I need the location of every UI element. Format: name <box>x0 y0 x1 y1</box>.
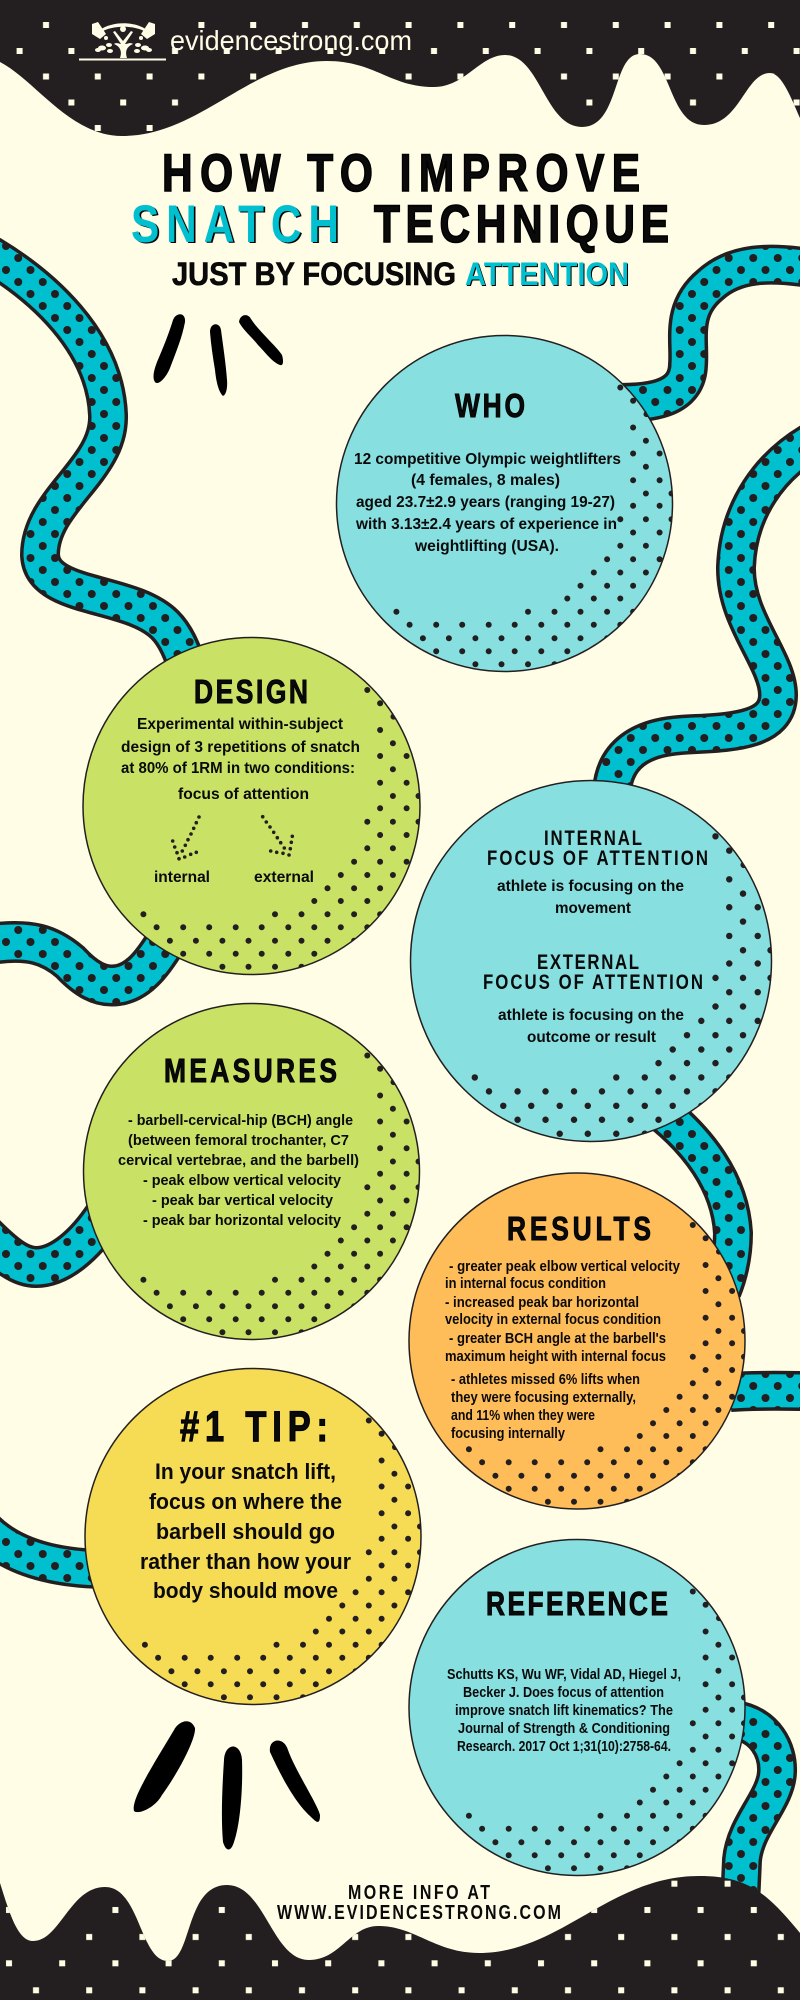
snake: ribbon between focus and results <box>665 1115 733 1290</box>
snake: long right ribbon <box>612 440 800 790</box>
text: results list: maximum height with internal focus <box>445 1349 666 1365</box>
heading: tip: #1 TIP: <box>180 1403 328 1451</box>
text: design description: design of 3 repetitions of snatch <box>121 739 360 756</box>
logo icon: barbell tree <box>79 22 166 60</box>
title: TECHNIQUE <box>374 196 669 254</box>
text: results list: focusing internally <box>451 1426 565 1442</box>
title <box>131 145 669 254</box>
text: tip advice: barbell should go <box>156 1519 335 1544</box>
text: tip advice <box>140 1459 351 1603</box>
heading: internal focus <box>487 827 708 871</box>
heading: internal focus: INTERNAL <box>544 827 642 851</box>
heading: external focus: EXTERNAL <box>537 951 639 975</box>
heading: internal focus: FOCUS OF ATTENTION <box>487 847 708 871</box>
text: who participants: 12 competitive Olympic weightlifters <box>354 451 621 468</box>
text: who participants: (4 females, 8 males) <box>411 472 560 489</box>
text: tip advice: focus on where the <box>149 1489 342 1514</box>
text: internal definition: movement <box>555 900 632 917</box>
footer text <box>277 1881 561 1923</box>
text: results list: - athletes missed 6% lifts when <box>451 1372 640 1388</box>
title: HOW TO IMPROVE <box>162 145 640 203</box>
heading: who: WHO <box>455 388 525 425</box>
text: measures list: cervical vertebrae, and the barbell) <box>118 1152 359 1169</box>
snake: left ribbon below design <box>0 935 170 986</box>
text: tip advice: In your snatch lift, <box>155 1459 336 1484</box>
panel: design <box>83 638 420 974</box>
arrow: dotted to external <box>263 817 292 855</box>
icon: top attention marks <box>154 314 283 396</box>
heading: design: DESIGN <box>194 674 308 711</box>
footer text: WWW.EVIDENCESTRONG.COM <box>277 1901 561 1923</box>
footer text: MORE INFO AT <box>348 1881 490 1903</box>
subtitle: ATTENTION <box>465 256 629 292</box>
panel: results <box>409 1173 745 1509</box>
text: citation: Research. 2017 Oct 1;31(10):2758-64. <box>457 1739 671 1755</box>
text: measures list: - peak bar horizontal velocity <box>143 1212 342 1229</box>
text: external definition <box>498 1007 684 1046</box>
panel: focus of attention definitions <box>410 780 772 1142</box>
text: results list: - increased peak bar horizontal <box>445 1295 639 1311</box>
text: who participants: with 3.13±2.4 years of experience in <box>355 516 617 533</box>
subtitle <box>172 256 629 292</box>
text: measures list <box>118 1112 359 1229</box>
heading: results: RESULTS <box>507 1211 651 1248</box>
snake: left ribbon by tip <box>0 1530 130 1569</box>
text: who participants: weightlifting (USA). <box>414 538 559 555</box>
text: results list <box>445 1259 680 1442</box>
text: who participants: aged 23.7±2.9 years (ranging 19-27) <box>356 494 615 511</box>
text: who participants <box>354 451 621 555</box>
text: external definition: athlete is focusing on the <box>498 1007 684 1024</box>
snake: upper left ribbon <box>0 255 188 670</box>
heading: reference: REFERENCE <box>486 1586 668 1623</box>
text: measures list: - peak elbow vertical velocity <box>143 1172 342 1189</box>
panel: who <box>336 336 672 672</box>
text: results list: they were focusing externally, <box>451 1390 636 1406</box>
text: measures list: - peak bar vertical velocity <box>152 1192 334 1209</box>
text: citation: Becker J. Does focus of attention <box>463 1685 664 1701</box>
arrow: dotted to internal <box>173 817 199 859</box>
text: external definition: outcome or result <box>527 1029 657 1046</box>
text: results list: - greater peak elbow vertical velocity <box>449 1259 680 1275</box>
snake: right ribbon by results <box>730 1391 800 1392</box>
text: internal definition: athlete is focusing on the <box>497 878 684 895</box>
text: tip advice: body should move <box>153 1578 338 1603</box>
panel: measures <box>84 1004 420 1340</box>
text: measures list: (between femoral trochanter, C7 <box>128 1132 349 1149</box>
text: citation: Journal of Strength & Conditioning <box>458 1721 670 1737</box>
text: citation <box>447 1667 681 1755</box>
text: measures list: - barbell-cervical-hip (BCH) angle <box>128 1112 353 1129</box>
text: design description: focus of attention <box>178 786 309 803</box>
logo wordmark: evidencestrong.com <box>170 25 412 56</box>
bottom dark wavy banner <box>0 1876 800 2000</box>
text: results list: in internal focus condition <box>445 1276 606 1292</box>
text: design description: Experimental within-subject <box>137 716 344 733</box>
icon: bottom attention marks <box>134 1721 320 1850</box>
text: results list: and 11% when they were <box>451 1408 595 1424</box>
label: internal: internal <box>154 869 210 886</box>
heading: external focus <box>483 951 703 995</box>
text: internal definition <box>497 878 684 917</box>
label: external: external <box>254 869 314 886</box>
text: design description: at 80% of 1RM in two conditions: <box>121 760 355 777</box>
subtitle: JUST BY FOCUSING <box>172 256 456 292</box>
text: results list: velocity in external focus condition <box>445 1312 661 1328</box>
text: tip advice: rather than how your <box>140 1549 351 1574</box>
top dark wavy banner <box>0 0 800 136</box>
snake: left ribbon below measures <box>0 1215 105 1267</box>
panel: tip <box>85 1368 421 1704</box>
text: citation: improve snatch lift kinematics? The <box>455 1703 673 1719</box>
text: results list: - greater BCH angle at the barbell's <box>449 1331 666 1347</box>
snake: upper right ribbon <box>620 265 800 403</box>
title: SNATCH <box>131 196 339 254</box>
text: design description <box>121 716 360 803</box>
heading: external focus: FOCUS OF ATTENTION <box>483 971 703 995</box>
snake: bottom right ribbon <box>735 1720 777 1905</box>
heading: measures: MEASURES <box>164 1053 337 1090</box>
panel: reference <box>409 1540 745 1876</box>
text: citation: Schutts KS, Wu WF, Vidal AD, Hiegel J, <box>447 1667 681 1683</box>
